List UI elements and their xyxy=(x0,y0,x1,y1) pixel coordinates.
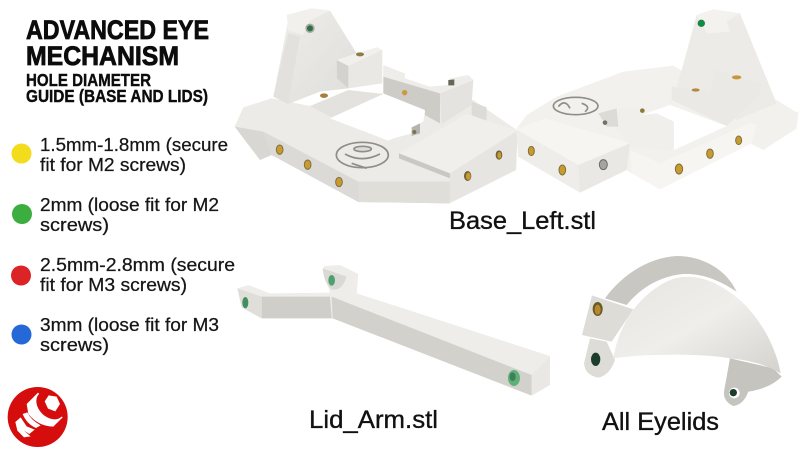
lower tab xyxy=(584,338,615,378)
model: Lid_Arm xyxy=(237,265,550,396)
title: MECHANISM xyxy=(26,41,179,71)
square opening xyxy=(642,105,727,150)
opening xyxy=(330,93,425,141)
legend: yellow hole size: fit for M2 screws) xyxy=(40,155,186,175)
mounting block xyxy=(582,295,633,342)
legend: yellow hole size xyxy=(12,135,228,175)
title: ADVANCED EYE xyxy=(26,15,209,45)
icon: red logo xyxy=(8,386,70,447)
legend: blue hole size xyxy=(12,315,219,355)
inner pillar xyxy=(617,107,673,150)
far wall and pillar xyxy=(383,65,487,136)
front faces xyxy=(235,127,450,203)
legend: yellow hole size: 1.5mm-1.8mm (secure xyxy=(40,135,228,155)
raised block xyxy=(399,114,518,203)
legend: red hole size xyxy=(11,255,235,295)
legend: blue hole size: screws) xyxy=(40,335,109,355)
engraved logo xyxy=(336,142,388,168)
label: All Eyelids: All Eyelids xyxy=(602,408,719,436)
model: All Eyelids xyxy=(582,256,782,406)
deck xyxy=(516,66,798,193)
dome xyxy=(613,277,781,373)
raised block xyxy=(516,118,630,193)
deck xyxy=(235,93,518,203)
right inner shell xyxy=(724,358,782,406)
label: Lid_Arm.stl: Lid_Arm.stl xyxy=(309,406,438,434)
back rim xyxy=(605,256,737,305)
front rail xyxy=(630,112,798,189)
legend: red hole size: 2.5mm-2.8mm (secure xyxy=(40,255,235,275)
legend: blue hole size: 3mm (loose fit for M3 xyxy=(40,315,219,335)
legend: green hole size xyxy=(12,195,219,235)
engraved logo xyxy=(553,97,598,115)
tall bracket xyxy=(273,8,357,104)
label: Base_Left.stl: Base_Left.stl xyxy=(449,207,596,235)
model: Base_Left front view xyxy=(235,8,518,203)
title: HOLE DIAMETER xyxy=(26,70,151,90)
model: Base_Left rear view xyxy=(516,9,798,193)
legend: red hole size: fit for M3 screws) xyxy=(40,275,187,295)
legend: green hole size: 2mm (loose fit for M2 xyxy=(40,195,219,215)
title xyxy=(26,15,209,106)
tall bracket xyxy=(677,9,777,120)
legend: green hole size: screws) xyxy=(40,215,109,235)
title: GUIDE (BASE AND LIDS) xyxy=(26,86,208,106)
inner post xyxy=(337,47,382,88)
inner post xyxy=(672,70,762,126)
floor xyxy=(310,90,383,117)
